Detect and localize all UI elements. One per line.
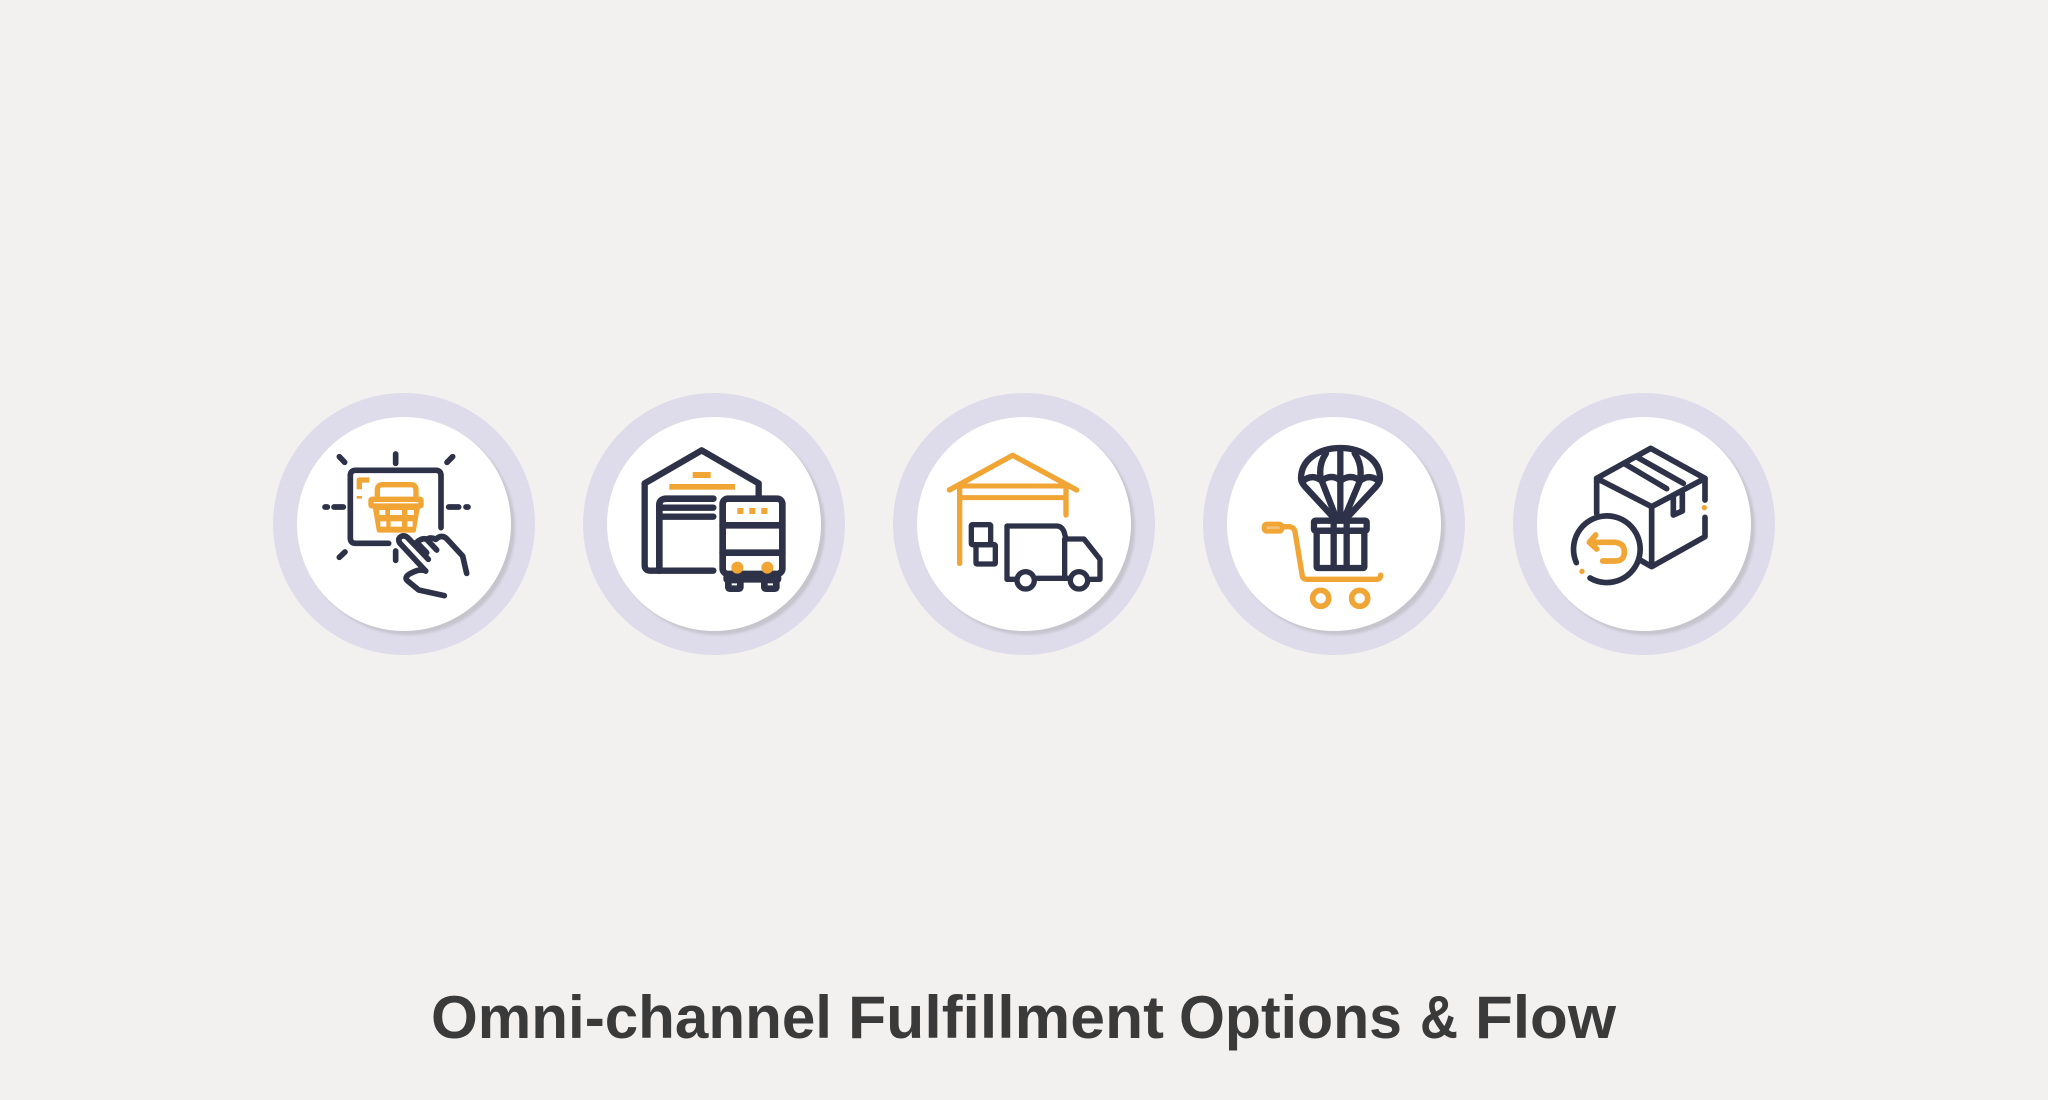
title: Omni-channel bbox=[431, 984, 832, 1051]
icon: parachute gift dropping into shopping cart bbox=[1264, 448, 1381, 606]
panel: online order badge bbox=[273, 393, 535, 655]
icon: parcel with return arrow bbox=[1572, 448, 1707, 583]
icon: tapping a shopping basket on screen bbox=[325, 454, 468, 596]
title: & bbox=[1420, 984, 1458, 1051]
title: Flow bbox=[1475, 984, 1616, 1051]
title: Options bbox=[1179, 984, 1402, 1051]
icon: warehouse with delivery truck bbox=[645, 450, 782, 589]
panel: distribution centre delivery badge bbox=[893, 393, 1155, 655]
panel: gift drop and cart badge bbox=[1203, 393, 1465, 655]
title: Fulfillment bbox=[848, 984, 1164, 1051]
title bbox=[431, 984, 1616, 1051]
panel: returns badge bbox=[1513, 393, 1775, 655]
panel: warehouse and truck badge bbox=[583, 393, 845, 655]
icon: depot roof with boxes and delivery van bbox=[949, 455, 1100, 589]
